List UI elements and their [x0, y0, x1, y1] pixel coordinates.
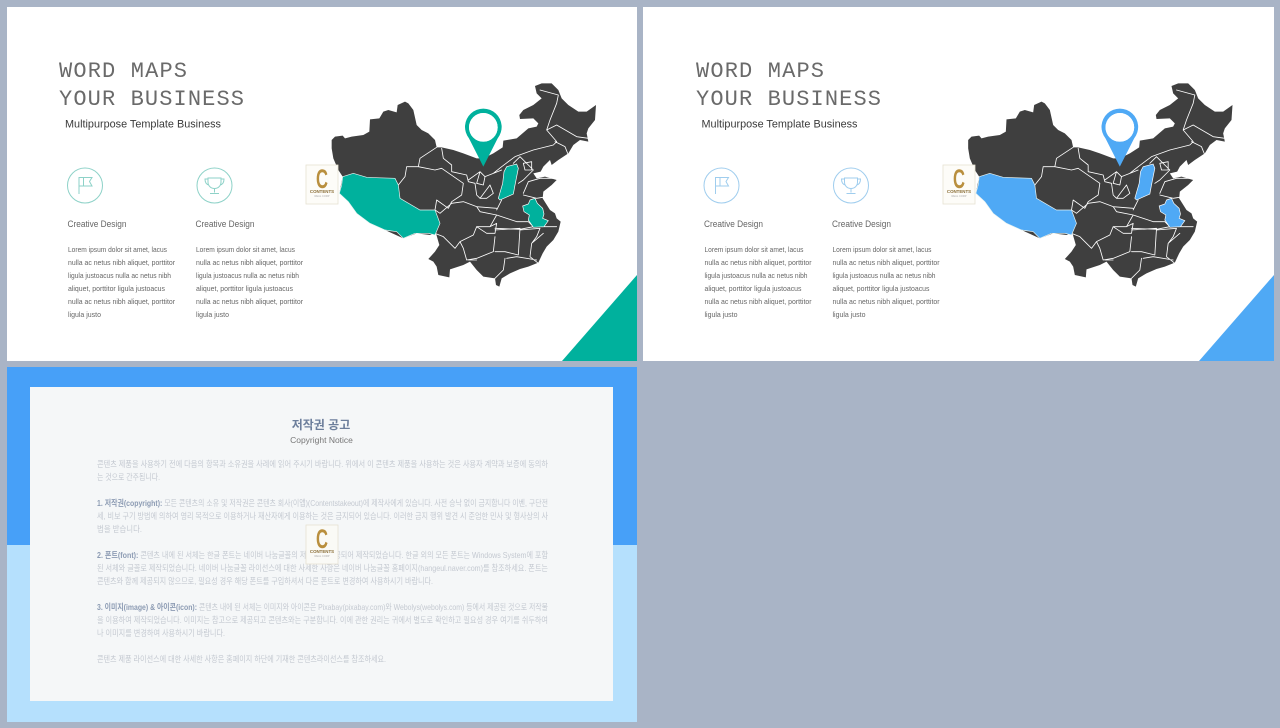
- clause 2: font: 2. 폰트(font): 콘텐츠 내에 된 서체는 한글 폰트는 네이버 나눔글꼴의 저작물로 제공되어 제작되었습니다. 한글 외의 모든 폰트는 Windows System에 포함: [97, 550, 548, 560]
- highlighted region: Anhui: [523, 198, 548, 227]
- green corner triangle: [562, 275, 637, 361]
- column 2 heading: Creative Design: [832, 219, 891, 229]
- subtitle: Multipurpose Template Business: [702, 118, 858, 130]
- contents logo badge: C: [316, 524, 328, 554]
- column 1 body text: nulla ac netus nibh aliquet, porttitor: [704, 297, 812, 306]
- contents logo badge: CONTENTS: [947, 189, 971, 194]
- contents logo badge: [306, 164, 338, 204]
- clause 2: font: [97, 550, 548, 586]
- icon: flag: [704, 168, 739, 203]
- column 1 body text: ligula justo: [68, 310, 101, 319]
- column 1 body text: Lorem ipsum dolor sit amet, lacus: [704, 245, 804, 254]
- highlighted region: Anhui: [1159, 198, 1185, 227]
- column 2 body text: nulla ac netus nibh aliquet, porttitor: [196, 258, 303, 267]
- column 2 body text: Lorem ipsum dolor sit amet, lacus: [196, 245, 295, 254]
- title: WORD MAPS: [59, 59, 187, 84]
- column 2 body text: nulla ac netus nibh aliquet, porttitor: [196, 297, 303, 306]
- panel: blue slide: [643, 7, 1274, 361]
- column 2 heading: Creative Design: [196, 219, 254, 229]
- clause 1: copyright: 1. 저작권(copyright): 모든 콘텐츠의 소유 및 저작권은 콘텐츠 회사(이앱)(Contentstakeout)에 제작사에게 있습니다. 사전 승낙 없이 금지합니다 이벤, 구단전: [97, 498, 548, 508]
- clause 1: copyright: 세, 비보 구기 방법에 의하여 영리 목적으로 이용하거나 재산자에게 이용하는 것은 금지되어 있습니다. 이러한 금지 행위 발견 시 준엄한 민사 및 형사상의 사: [97, 511, 548, 521]
- column 2 body text: [196, 245, 303, 319]
- clause 2: font: 된 서체와 글꼴로 제작되었습니다. 네이버 나눔글꼴 라이선스에 대한 사세한 사항은 네이버 나눔글꼴 홈페이지(hangeul.naver.com)를 참조하세요. 폰트는: [97, 563, 548, 573]
- panel: green slide: [7, 7, 637, 361]
- contents logo badge: CONTENTS: [310, 189, 334, 194]
- contents logo badge: CONTENTS: [310, 549, 334, 554]
- clause 3: image and icon: 3. 이미지(image) & 아이콘(icon): 콘텐츠 내에 된 서체는 이미지와 아이콘은 Pixabay(pixabay.com)와 Webolys(webolys.com) 등에서 제공된 것으로 저작물: [97, 602, 548, 612]
- clause 3: image and icon: 나 이미지를 변경하여 사용하시기 바랍니다.: [97, 628, 225, 638]
- column 1 body text: Lorem ipsum dolor sit amet, lacus: [68, 245, 167, 254]
- clause 3: image and icon: 을 이용하여 제작되었습니다. 이미지는 참고으로 제공되고 콘텐츠와는 구분합니다. 이에 관한 권리는 귀에서 별도로 확인하고 필요성 경우 여기를 쉬두하여: [97, 615, 548, 625]
- clause 3: image and icon: [97, 602, 548, 638]
- title: YOUR BUSINESS: [59, 87, 244, 112]
- icon: flag: [68, 168, 102, 203]
- clause 2: font: 콘텐츠와 함께 제공되지 않으므로, 필요성 경우 해당 폰트를 구입하셔서 다른 폰트로 변경하여 사용하시기 바랍니다.: [97, 576, 433, 586]
- icon: location pin: [1101, 109, 1138, 167]
- column 1 body text: ligula justoacus nulla ac netus nibh: [68, 271, 171, 280]
- contents logo badge: REAL CORP: [315, 554, 330, 558]
- column 2 body text: Lorem ipsum dolor sit amet, lacus: [832, 245, 932, 254]
- column 1 body text: nulla ac netus nibh aliquet, porttitor: [68, 258, 175, 267]
- title: YOUR BUSINESS: [696, 87, 881, 112]
- column 1 body text: [704, 245, 812, 319]
- column 1 body text: aliquet, porttitor ligula justoacus: [68, 284, 165, 293]
- notice subheading: Copyright Notice: [290, 435, 353, 445]
- icon: location pin: [465, 109, 502, 167]
- notice intro text: 콘텐츠 제품을 사용하기 전에 다음의 항목과 소유권을 사례에 읽어 주시기 바랍니다. 위에서 이 콘텐츠 제품을 사용하는 것은 사용자 계약과 보증에 동의하: [97, 459, 548, 469]
- clause 1: copyright: 법을 받습니다.: [97, 524, 142, 534]
- subtitle: Multipurpose Template Business: [65, 118, 221, 130]
- column 1 body text: nulla ac netus nibh aliquet, porttitor: [704, 258, 812, 267]
- column 2 body text: aliquet, porttitor ligula justoacus: [196, 284, 293, 293]
- highlighted region: Tibet: [339, 173, 440, 238]
- column 2 body text: ligula justo: [832, 310, 866, 319]
- column 2 body text: ligula justoacus nulla ac netus nibh: [832, 271, 936, 280]
- column 1 body text: [68, 245, 175, 319]
- column 2 body text: [832, 245, 940, 319]
- column 1 body text: aliquet, porttitor ligula justoacus: [704, 284, 802, 293]
- contents logo badge: REAL CORP: [315, 194, 330, 198]
- contents logo badge: C: [953, 164, 965, 194]
- notice intro text: 는 것으로 간주됩니다.: [97, 472, 160, 482]
- column 2 body text: nulla ac netus nibh aliquet, porttitor: [832, 258, 940, 267]
- highlighted region: Shanxi: [498, 164, 518, 200]
- highlighted region: Tibet: [976, 173, 1076, 238]
- column 1 heading: Creative Design: [68, 219, 126, 229]
- notice heading: 저작권 공고: [292, 417, 350, 432]
- clause 1: copyright: [97, 498, 548, 534]
- notice intro text: [97, 459, 548, 482]
- title: [696, 59, 881, 112]
- contents logo badge: [943, 164, 975, 204]
- title: WORD MAPS: [696, 59, 824, 84]
- column 1 body text: nulla ac netus nibh aliquet, porttitor: [68, 297, 175, 306]
- contents logo badge: [306, 524, 338, 564]
- column 2 body text: nulla ac netus nibh aliquet, porttitor: [832, 297, 940, 306]
- column 2 body text: ligula justoacus nulla ac netus nibh: [196, 271, 299, 280]
- column 1 heading: Creative Design: [704, 219, 763, 229]
- column 1 body text: ligula justoacus nulla ac netus nibh: [704, 271, 808, 280]
- highlighted region: Shanxi: [1135, 164, 1155, 200]
- notice card: [30, 387, 613, 701]
- closing note: 콘텐츠 제품 라이선스에 대한 사세한 사항은 홈페이지 하단에 기재한 콘텐츠라이선스를 참조하세요.: [97, 654, 386, 664]
- panel: copyright notice: [7, 367, 637, 722]
- contents logo badge: REAL CORP: [952, 194, 967, 198]
- column 2 body text: aliquet, porttitor ligula justoacus: [832, 284, 930, 293]
- title: [59, 59, 244, 112]
- icon: trophy: [197, 168, 232, 203]
- blue corner triangle: [1199, 275, 1274, 361]
- map of China, green highlights: [332, 83, 596, 287]
- contents logo badge: C: [316, 164, 328, 194]
- column 2 body text: ligula justo: [196, 310, 229, 319]
- icon: trophy: [834, 168, 868, 203]
- column 1 body text: ligula justo: [704, 310, 738, 319]
- map of China, blue highlights: [968, 83, 1232, 287]
